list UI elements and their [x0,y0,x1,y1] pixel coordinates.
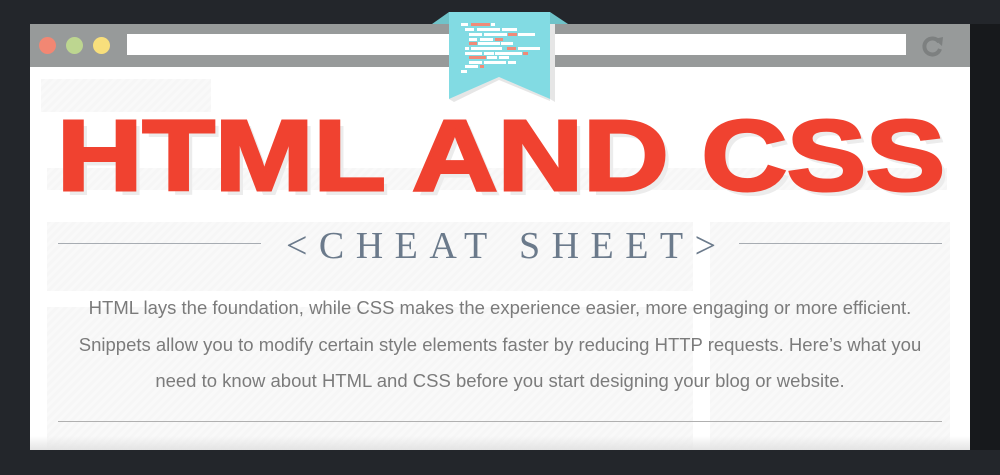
right side shadow strip [970,24,1000,450]
icon: red dot [39,37,56,54]
ribbon bookmark [432,12,568,102]
bottom fade [30,436,970,450]
intro paragraph: HTML lays the foundation, while CSS makes the experience easier, more engaging or more efficient. [89,297,911,318]
address bar [127,34,906,55]
bottom rule [58,421,942,422]
icon: green dot [66,37,83,54]
browser top bar [30,24,970,67]
icon: yellow dot [93,37,110,54]
subtitle: <CHEAT SHEET> with rules: <CHEAT SHEET> [286,225,716,266]
intro paragraph [79,297,921,391]
intro paragraph: need to know about HTML and CSS before you start designing your blog or website. [155,370,845,391]
intro paragraph: Snippets allow you to modify certain style elements faster by reducing HTTP requests. Here’s what you [79,334,921,354]
icon: reload [922,36,943,56]
hatched background panels [41,79,211,112]
